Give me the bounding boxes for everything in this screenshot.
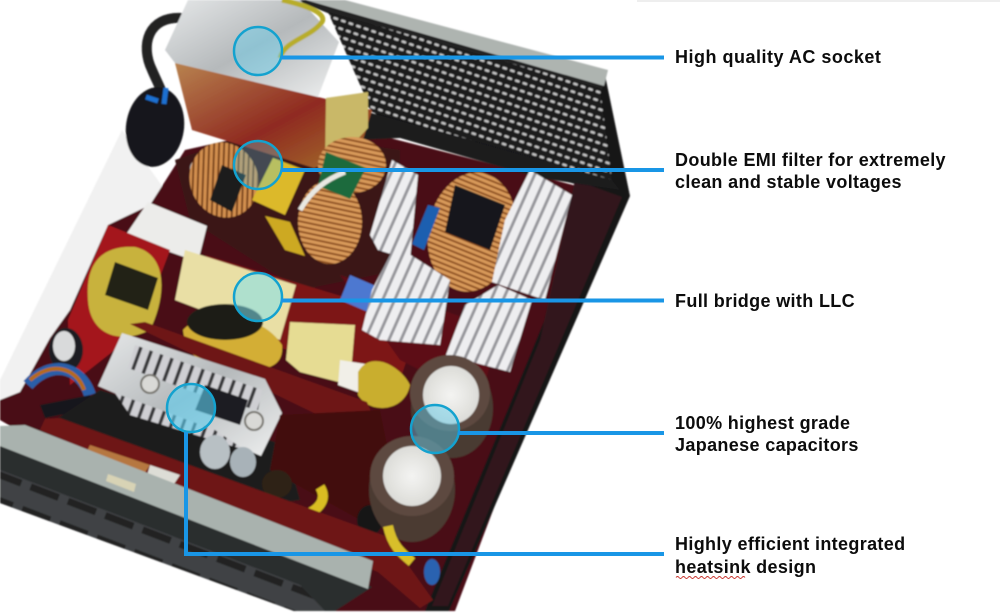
blue capacitor	[412, 205, 440, 250]
yellow block	[252, 158, 305, 215]
marker circle	[411, 405, 459, 453]
screw left	[141, 375, 159, 393]
red vertical card	[130, 322, 388, 453]
yellow glue	[305, 487, 323, 515]
white tie	[300, 172, 345, 210]
black tube	[40, 395, 95, 418]
label: Highly efficient integrated	[675, 534, 905, 554]
lower big capacitor	[369, 436, 455, 542]
relay	[125, 202, 207, 262]
silver front lip	[0, 425, 373, 589]
dark ramp below grille	[355, 112, 620, 190]
tab	[106, 474, 136, 492]
top rail	[306, 0, 608, 86]
label: clean and stable voltages	[675, 172, 902, 192]
callout: capacitors	[411, 405, 859, 455]
blue wires	[146, 88, 166, 104]
callout: AC socket	[234, 27, 881, 75]
label: Double EMI filter for extremely	[675, 150, 946, 170]
dark front face	[0, 442, 372, 611]
label: Japanese capacitors	[675, 435, 859, 455]
red board patch	[68, 225, 170, 385]
dark coil top	[187, 304, 263, 340]
large coil core	[445, 185, 505, 250]
cream transformer	[175, 250, 296, 340]
screw	[190, 160, 206, 176]
left yellow tape winding	[88, 247, 161, 337]
ferrite core	[121, 83, 189, 171]
dark area under heatsink	[55, 390, 300, 505]
green wrap	[318, 152, 366, 199]
capacitor top	[53, 331, 75, 361]
callout: full bridge	[234, 273, 855, 321]
leader elbow	[186, 432, 664, 554]
blue lower cap	[424, 559, 440, 585]
copper fins lower left	[85, 445, 150, 480]
centre yellow cylinder	[183, 316, 282, 370]
aluminium heatsink	[98, 333, 282, 456]
small coil	[262, 470, 292, 498]
leader line	[281, 298, 664, 302]
leader line	[458, 431, 664, 435]
wire bundle	[28, 369, 90, 395]
translucent filter wrap	[175, 63, 372, 168]
centre coil bottom	[298, 180, 362, 264]
callout: heatsink	[167, 384, 905, 578]
heatsink dark slot	[195, 385, 248, 425]
label: heatsink design	[675, 557, 816, 577]
heatsink d	[446, 285, 532, 372]
spellcheck squiggle	[676, 576, 745, 578]
screw right	[245, 412, 263, 430]
red board front strip	[40, 418, 433, 608]
lower board	[270, 410, 400, 520]
leader line	[281, 56, 664, 60]
black choke	[357, 505, 383, 535]
heatsink lower fins	[115, 393, 245, 450]
rail edge	[296, 0, 604, 92]
callout: EMI filter	[234, 141, 946, 192]
small capacitor	[49, 328, 83, 372]
faint top edge strip	[637, 0, 1000, 2]
vent front face	[0, 470, 325, 611]
heatsink c	[492, 170, 572, 300]
upper big capacitor	[410, 355, 493, 458]
metal shield box	[165, 0, 339, 97]
small capacitors	[200, 435, 230, 469]
marker circle	[167, 384, 215, 432]
marker circle	[234, 273, 282, 321]
left copper coil	[179, 133, 269, 227]
power supply photo	[0, 0, 630, 611]
cream inductor	[286, 322, 355, 385]
grille panel	[328, 12, 612, 180]
large copper coil	[418, 165, 526, 299]
label: Full bridge with LLC	[675, 291, 855, 311]
wire bundle colours	[30, 369, 84, 390]
marker circle	[234, 27, 282, 75]
heatsink a	[370, 160, 418, 260]
blue box	[340, 275, 378, 312]
dark base around coils	[175, 130, 400, 290]
label: 100% highest grade	[675, 413, 850, 433]
yellow glue right	[388, 526, 412, 562]
yellow block lower	[265, 216, 305, 256]
centre coil top	[318, 137, 386, 193]
label: High quality AC socket	[675, 47, 881, 67]
yellow insulation	[325, 92, 368, 160]
winding black core	[105, 262, 158, 310]
red board centre	[205, 255, 420, 380]
leader line	[281, 168, 664, 172]
white insulation	[145, 465, 180, 490]
right inner wall tint	[432, 180, 622, 606]
cable	[147, 18, 182, 100]
small yellow transformer	[358, 361, 410, 408]
left side wall	[0, 130, 165, 420]
white tape	[338, 360, 372, 395]
red board right	[340, 275, 500, 400]
coil black core	[210, 165, 246, 212]
main circuit board	[0, 120, 612, 611]
small capacitor two	[230, 447, 256, 477]
heatsink b	[362, 245, 450, 345]
marker circle	[234, 141, 282, 189]
right casing wall	[360, 70, 630, 611]
earth wire	[280, 0, 323, 58]
heatsink fin rows	[128, 345, 262, 410]
